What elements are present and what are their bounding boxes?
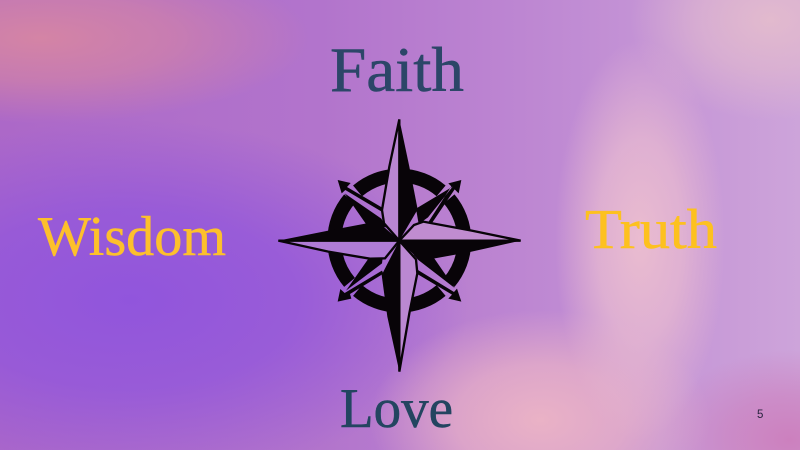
compass ring segments (334, 176, 464, 306)
east point (399, 222, 521, 241)
south point (399, 241, 417, 372)
label: Wisdom: Wisdom (38, 206, 226, 268)
label: Love: Love (340, 378, 453, 440)
icon: compass rose (278, 119, 521, 372)
west point (278, 241, 399, 259)
south point shadow half (382, 241, 399, 372)
east point shadow half (399, 241, 521, 259)
diagonal points (338, 180, 461, 302)
north point (382, 119, 399, 241)
heading: Faith: Faith (330, 35, 464, 105)
page number: 5 (757, 409, 763, 421)
label: Truth: Truth (585, 199, 717, 261)
north point shadow half (399, 119, 418, 241)
west point shadow half (278, 223, 399, 241)
